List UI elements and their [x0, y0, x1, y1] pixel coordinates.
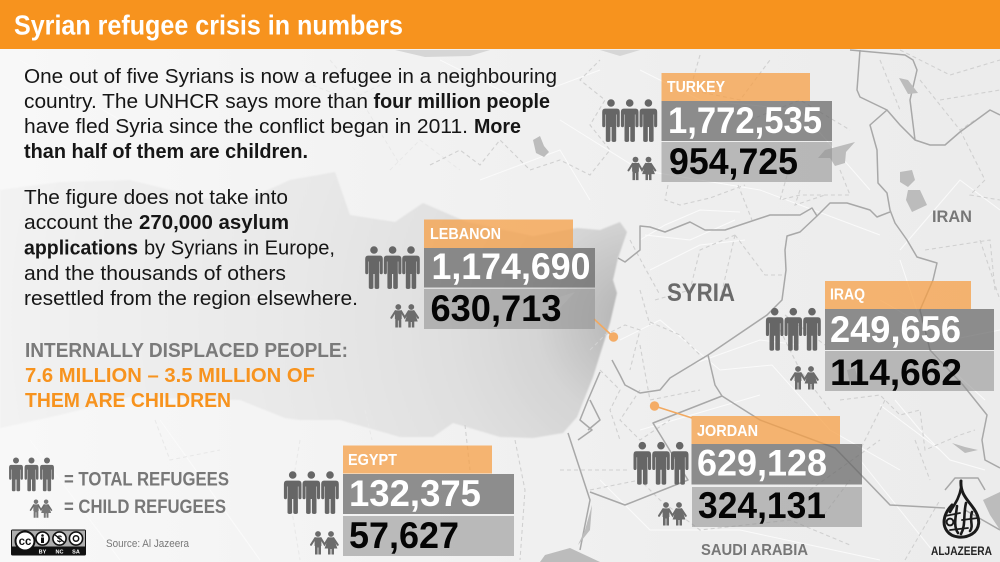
icon: child refugees: [311, 531, 338, 554]
country label: Syria: SYRIA: [667, 279, 735, 307]
panel: Lebanon: 1,174,690: [432, 245, 590, 287]
panel: Turkey: [602, 73, 832, 182]
intro paragraph: One out of five Syrians is now a refugee in a neighbouring: [24, 66, 557, 88]
asylum paragraph: by Syrians in Europe,: [144, 238, 335, 260]
panel: Egypt: [284, 446, 514, 556]
source credit: Source: Al Jazeera: [106, 538, 190, 550]
icon: child refugees: [628, 157, 655, 180]
asylum paragraph: [24, 187, 358, 310]
icon: creative commons badge: [11, 530, 86, 556]
icon: total refugees: [284, 471, 339, 514]
map: country borders: [568, 50, 1000, 550]
internally displaced callout: 7.6 MILLION – 3.5 MILLION OF: [25, 364, 315, 387]
logo: Al Jazeera: [931, 481, 992, 558]
icon: legend child refugees: [31, 499, 51, 518]
intro paragraph: than half of them are children.: [24, 141, 308, 163]
title: Syrian refugee crisis in numbers: [14, 10, 403, 40]
connector: Jordan: [650, 401, 692, 418]
map: lakes and gulfs: [533, 78, 1000, 562]
panel: Jordan: [634, 416, 862, 527]
map: dashed boundaries, west: [155, 60, 460, 560]
map: Black Sea edge: [395, 50, 640, 57]
asylum paragraph: and the thousands of others: [24, 263, 286, 285]
icon: creative commons badge: $: [57, 534, 63, 545]
panel: Jordan: 324,131: [698, 484, 826, 526]
icon: calligraphic drop: [944, 481, 979, 537]
panel: Turkey: 954,725: [669, 140, 798, 182]
icon: child refugees: [659, 502, 686, 526]
panel: Egypt: EGYPT: [348, 452, 397, 469]
panel: Iraq: IRAQ: [830, 286, 865, 304]
title bar: [0, 0, 1000, 49]
panel: Iraq: [766, 281, 994, 393]
panel: Iraq: 114,662: [830, 351, 962, 393]
asylum paragraph: account the: [24, 212, 133, 234]
asylum paragraph: applications: [24, 238, 138, 260]
panel: Jordan: JORDAN: [697, 423, 758, 440]
panel: Turkey: 1,772,535: [668, 99, 822, 141]
panel: Lebanon: LEBANON: [430, 226, 501, 243]
icon: legend total refugees: [9, 457, 54, 491]
map: Crete: [245, 291, 335, 301]
panel: Turkey: TURKEY: [667, 79, 725, 96]
map: Mediterranean sea: [0, 172, 627, 438]
icon: child refugees: [391, 304, 418, 328]
map: Cyprus: [520, 292, 575, 318]
internally displaced callout: [25, 339, 348, 412]
icon: total refugees: [365, 246, 420, 289]
asylum paragraph: resettled from the region elsewhere.: [24, 288, 358, 310]
legend text: total refugees: = TOTAL REFUGEES: [64, 470, 229, 490]
panel: Egypt: 57,627: [349, 514, 459, 556]
intro paragraph: four million people: [374, 91, 550, 113]
icon: creative commons badge: BY: [39, 550, 47, 556]
intro paragraph: have fled Syria since the conflict began in 2011.: [24, 116, 468, 138]
intro paragraph: [24, 66, 557, 163]
icon: total refugees: [766, 308, 821, 351]
country label: Saudi Arabia: SAUDI ARABIA: [701, 542, 808, 559]
internally displaced callout: THEM ARE CHILDREN: [25, 389, 231, 412]
icon: total refugees: [634, 442, 688, 485]
icon: child refugees: [791, 366, 818, 390]
connector: Lebanon: [594, 319, 618, 342]
panel: Iraq: 249,656: [830, 308, 961, 350]
asylum paragraph: The figure does not take into: [24, 187, 288, 209]
legend: [9, 457, 229, 518]
panel: Egypt: 132,375: [349, 472, 481, 514]
asylum paragraph: 270,000 asylum: [139, 212, 289, 234]
intro paragraph: country. The UNHCR says more than: [24, 91, 368, 113]
map: dashed boundaries, east: [430, 50, 1000, 560]
icon: creative commons badge: NC: [56, 550, 63, 556]
panel: Jordan: 629,128: [697, 442, 827, 484]
icon: creative commons badge: cc: [19, 536, 32, 548]
icon: creative commons badge: SA: [72, 550, 80, 556]
panel: Lebanon: 630,713: [430, 287, 562, 329]
internally displaced callout: INTERNALLY DISPLACED PEOPLE:: [25, 339, 348, 362]
panel: Lebanon: [365, 220, 595, 329]
country label: Iran: IRAN: [932, 207, 972, 226]
icon: total refugees: [602, 99, 657, 142]
legend text: child refugees: = CHILD REFUGEES: [64, 497, 226, 518]
intro paragraph: More: [474, 116, 521, 138]
